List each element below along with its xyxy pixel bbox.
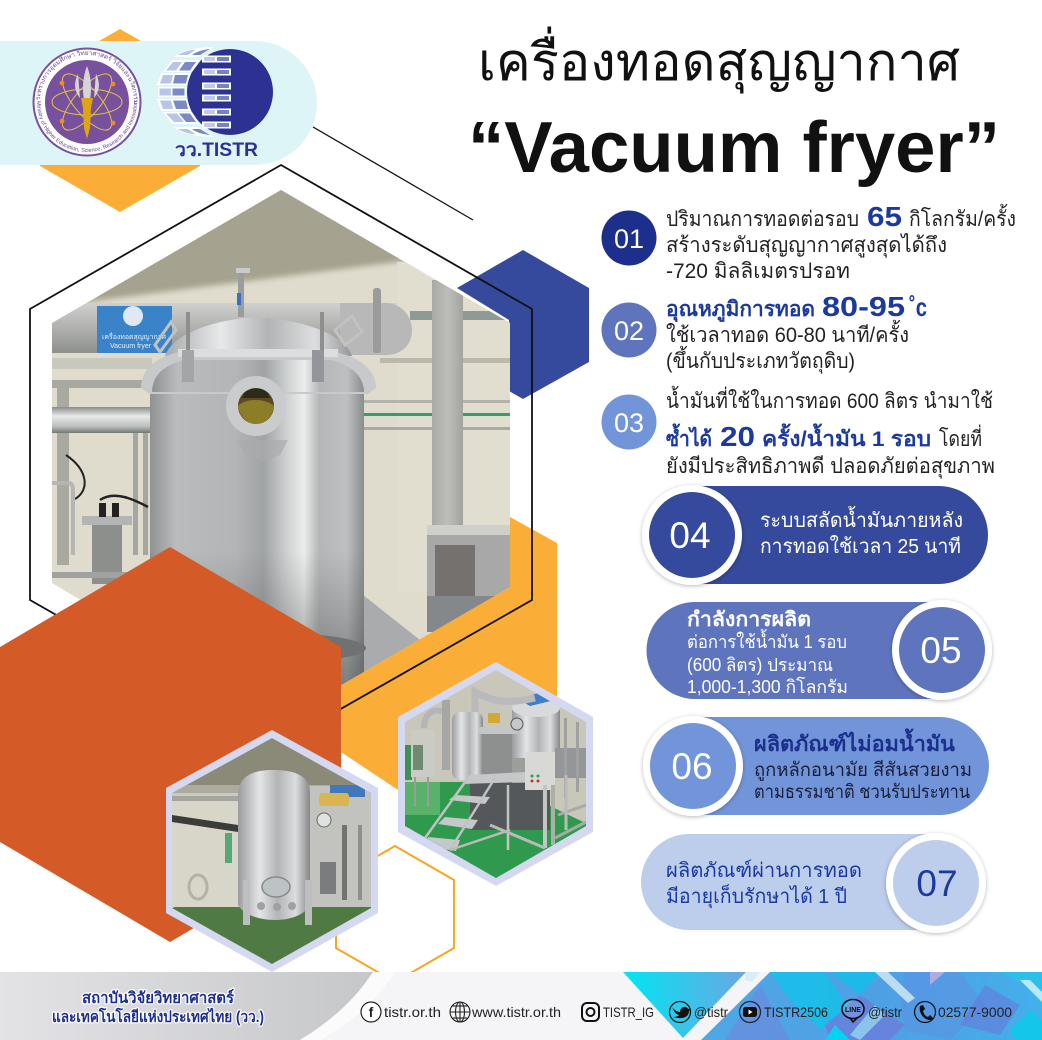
main photo: vacuum fryer tank <box>52 190 510 686</box>
item 07: ผลิตภัณฑ์ผ่านการทอด <box>666 859 862 882</box>
item 01 <box>602 201 1016 283</box>
item 02: ˚c <box>909 292 927 322</box>
item 03: โดยที่ <box>939 424 982 451</box>
logo: ministry seal <box>32 48 142 156</box>
hexagon outline: black <box>30 165 532 743</box>
footer: grey band <box>0 972 373 1040</box>
item 05 <box>646 600 992 700</box>
pill 04 <box>700 486 988 584</box>
footer: contact links: TISTR2506 <box>764 1004 828 1020</box>
item 06: ถูกหลักอนามัย สีสันสวยงาม <box>754 759 972 781</box>
item 02: 80-95 <box>822 291 905 322</box>
item 07: มีอายุเก็บรักษาได้ 1 ปี <box>666 883 847 909</box>
item 01: กิโลกรัม/ครั้ง <box>909 204 1016 231</box>
logo: TISTR: วว.TISTR <box>175 140 258 161</box>
badge 02: 02 <box>614 316 644 346</box>
hexagon: lower orange <box>341 517 557 790</box>
badge 05 <box>892 600 992 700</box>
item 05: 1,000-1,300 กิโลกรัม <box>687 676 848 697</box>
icon: globe <box>450 1002 470 1022</box>
item 03: 20 <box>720 421 755 452</box>
item 07 <box>641 833 986 933</box>
footer: organisation name <box>52 989 264 1026</box>
item 04: การทอดใช้เวลา 25 นาที <box>760 535 961 558</box>
item 06: ตามธรรมชาติ ชวนรับประทาน <box>754 782 970 803</box>
icon: youtube <box>740 1002 760 1022</box>
icon: facebook <box>361 1002 381 1022</box>
badge 06 <box>643 716 743 816</box>
item 06: ผลิตภัณฑ์ไม่อมน้ำมัน <box>754 728 956 756</box>
badge 04 <box>642 485 742 585</box>
footer: contact links: www.tistr.or.th <box>471 1004 561 1020</box>
icon: instagram <box>582 1003 599 1021</box>
item 02: ใช้เวลาทอด 60-80 นาที/ครั้ง <box>666 320 909 347</box>
footer <box>0 972 1042 1040</box>
hexagon: blue <box>457 250 589 399</box>
item 02 <box>602 291 927 374</box>
badge 02 <box>602 302 656 358</box>
item 01: 65 <box>867 201 902 232</box>
main photo: vacuum fryer tank: เครื่องทอดสุญญากาศ <box>102 332 167 341</box>
item 03: ครั้ง/น้ำมัน 1 รอบ <box>762 423 931 451</box>
pill 06 <box>700 717 989 815</box>
item 04 <box>642 485 988 585</box>
badge 03 <box>602 394 656 450</box>
icon: phone <box>914 1002 936 1022</box>
photo: vessel hexagon <box>166 730 378 972</box>
badge 06: 06 <box>671 746 713 787</box>
item 01: สร้างระดับสุญญากาศสูงสุดได้ถึง <box>666 233 947 258</box>
logo panel <box>0 41 317 165</box>
item 04: ระบบสลัดน้ำมันภายหลัง <box>760 506 963 532</box>
hexagon: red-orange <box>0 547 341 942</box>
item 03: ซ้ำได้ <box>666 423 712 451</box>
badge 07: 07 <box>916 863 958 904</box>
item 02: (ขึ้นกับประเภทวัตถุดิบ) <box>666 346 855 374</box>
item 05: (600 ลิตร) ประมาณ <box>687 655 833 675</box>
footer: organisation name: สถาบันวิจัยวิทยาศาสตร์ <box>82 989 235 1007</box>
footer: contact links: @tistr <box>694 1004 728 1020</box>
item 05: ต่อการใช้น้ำมัน 1 รอบ <box>687 629 847 652</box>
item 03: ยังมีประสิทธิภาพดี ปลอดภัยต่อสุขภาพ <box>666 455 995 479</box>
item 01: ปริมาณการทอดต่อรอบ <box>666 208 859 231</box>
title: Thai: เครื่องทอดสุญญากาศ <box>478 26 960 94</box>
icon: LINE: LINE <box>845 1007 861 1014</box>
badge 04: 04 <box>669 515 711 556</box>
icon: twitter <box>670 1002 691 1022</box>
pill 05 <box>646 602 935 699</box>
footer: contact links: TISTR_IG <box>603 1004 654 1020</box>
hexagon outline: orange <box>336 846 454 982</box>
photo: production line hexagon <box>398 662 600 886</box>
hexagon: top orange <box>40 29 200 212</box>
item 01: -720 มิลลิเมตรปรอท <box>666 260 850 283</box>
icon: facebook: f <box>369 1004 374 1020</box>
badge 03: 03 <box>614 408 644 438</box>
logo: TISTR <box>157 47 273 161</box>
footer: contact links: 02577-9000 <box>938 1004 1012 1020</box>
title: English: “Vacuum fryer” <box>468 108 1000 188</box>
item 06 <box>643 716 989 816</box>
line: diagonal accent <box>313 127 473 220</box>
logo: ministry seal: Ministry of Higher Education, Science, Research and Innovation <box>37 101 137 152</box>
badge 01 <box>602 210 656 266</box>
item 02: อุณหภูมิการทอด <box>666 298 815 323</box>
footer: contact links <box>361 1000 1012 1022</box>
item 03: น้ำมันที่ใช้ในการทอด 600 ลิตร นำมาใช้ <box>666 386 993 413</box>
footer: organisation name: และเทคโนโลยีแห่งประเทศไทย (วว.) <box>52 1007 264 1026</box>
item 05: กำลังการผลิต <box>687 609 811 631</box>
badge 05: 05 <box>920 630 962 671</box>
main photo: vacuum fryer tank: Vacuum fryer <box>110 343 152 350</box>
footer: contact links: tistr.or.th <box>384 1004 441 1020</box>
badge 07 <box>886 833 986 933</box>
footer: contact links: @tistr <box>868 1004 902 1020</box>
footer: pattern <box>623 972 1042 1040</box>
icon: LINE <box>842 1000 864 1022</box>
item 03 <box>602 386 995 479</box>
pill 07 <box>641 834 930 930</box>
badge 01: 01 <box>614 224 644 254</box>
